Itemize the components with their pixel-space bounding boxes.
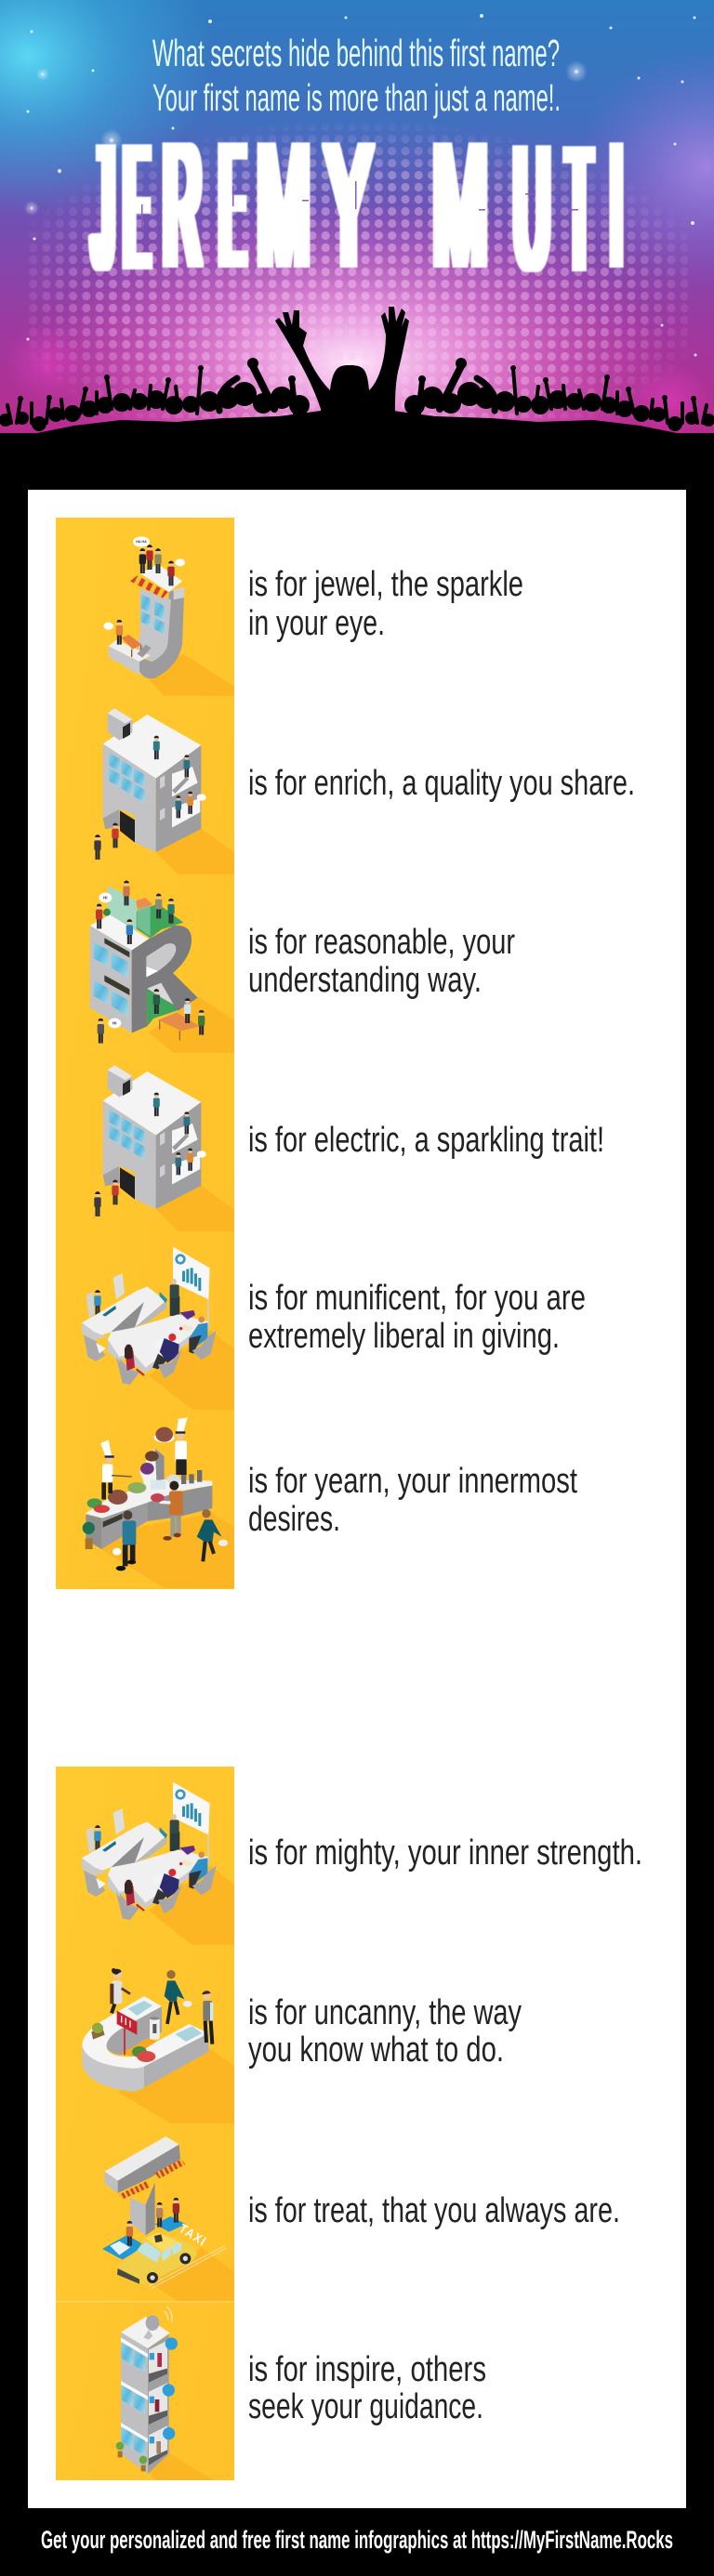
icon: letter M meeting table (second) — [82, 1782, 234, 1945]
title: name in distressed white letters: R — [164, 107, 201, 304]
icon: letter R building: HI — [103, 896, 108, 900]
panel: upper yellow illustration column — [56, 518, 234, 1589]
text: letter U line: you know what to do. — [248, 2031, 504, 2070]
icon: letter U counter — [82, 1968, 234, 2123]
panel: lower yellow illustration column — [56, 1767, 234, 2480]
title: name in distressed white letters: E — [220, 107, 245, 304]
icon: letter J building — [103, 536, 234, 696]
title: name in distressed white letters: M — [258, 107, 310, 304]
text: I — [612, 107, 621, 304]
text: letter J line: in your eye. — [248, 604, 385, 643]
text: letter Y line: desires. — [248, 1500, 340, 1539]
text: letter U line: is for uncanny, the way — [248, 1993, 522, 2032]
panel: white content panel — [28, 490, 686, 2508]
crowd silhouette — [0, 307, 714, 496]
title: name in distressed white letters — [93, 107, 621, 308]
text: letter R line: understanding way. — [248, 961, 482, 1000]
icon: letter R building: HI — [112, 1021, 117, 1026]
icon: letter T taxi stand: TAXI — [177, 2221, 210, 2249]
title: name in distressed white letters: E — [125, 109, 149, 306]
title: name in distressed white letters: U — [514, 110, 549, 307]
icon: letter T taxi stand — [102, 2136, 234, 2302]
text: letter I line — [248, 2350, 486, 2426]
icon: letter M meeting table — [82, 1247, 234, 1410]
text: letter Y line — [248, 1462, 577, 1539]
text: letter I line: is for inspire, others — [248, 2350, 486, 2389]
icon: letter I tower — [56, 2301, 234, 2480]
icon: letter Y buffet counter — [83, 1417, 234, 1588]
text: letter J line: is for jewel, the sparkle — [248, 565, 523, 604]
icon: letter R building — [90, 881, 234, 1053]
icon: letter E building — [94, 708, 234, 874]
text: letter Y line: is for yearn, your innermost — [248, 1462, 577, 1501]
text: letter U line — [248, 1993, 522, 2070]
title: name in distressed white letters: Y — [325, 107, 372, 304]
text: letter M line — [248, 1279, 586, 1356]
text: T — [567, 111, 591, 308]
icon: letter J building: HA HA — [136, 540, 147, 544]
text: letter J line — [248, 565, 523, 643]
text: second letter E line: is for electric, a sparkling trait! — [248, 1121, 604, 1160]
icon: letter E building (second) — [94, 1065, 234, 1231]
title: name in distressed white letters: J — [93, 109, 113, 306]
text: letter R line: is for reasonable, your — [248, 923, 515, 962]
header banner background — [0, 0, 714, 433]
text: letter I line: seek your guidance. — [248, 2387, 483, 2426]
text: letter R line — [248, 923, 515, 1000]
title: name in distressed white letters: M — [433, 107, 487, 304]
text: letter M line: extremely liberal in giving. — [248, 1317, 560, 1356]
subtitle text — [152, 32, 561, 119]
text: letter M line: is for munificent, for you are — [248, 1279, 586, 1318]
